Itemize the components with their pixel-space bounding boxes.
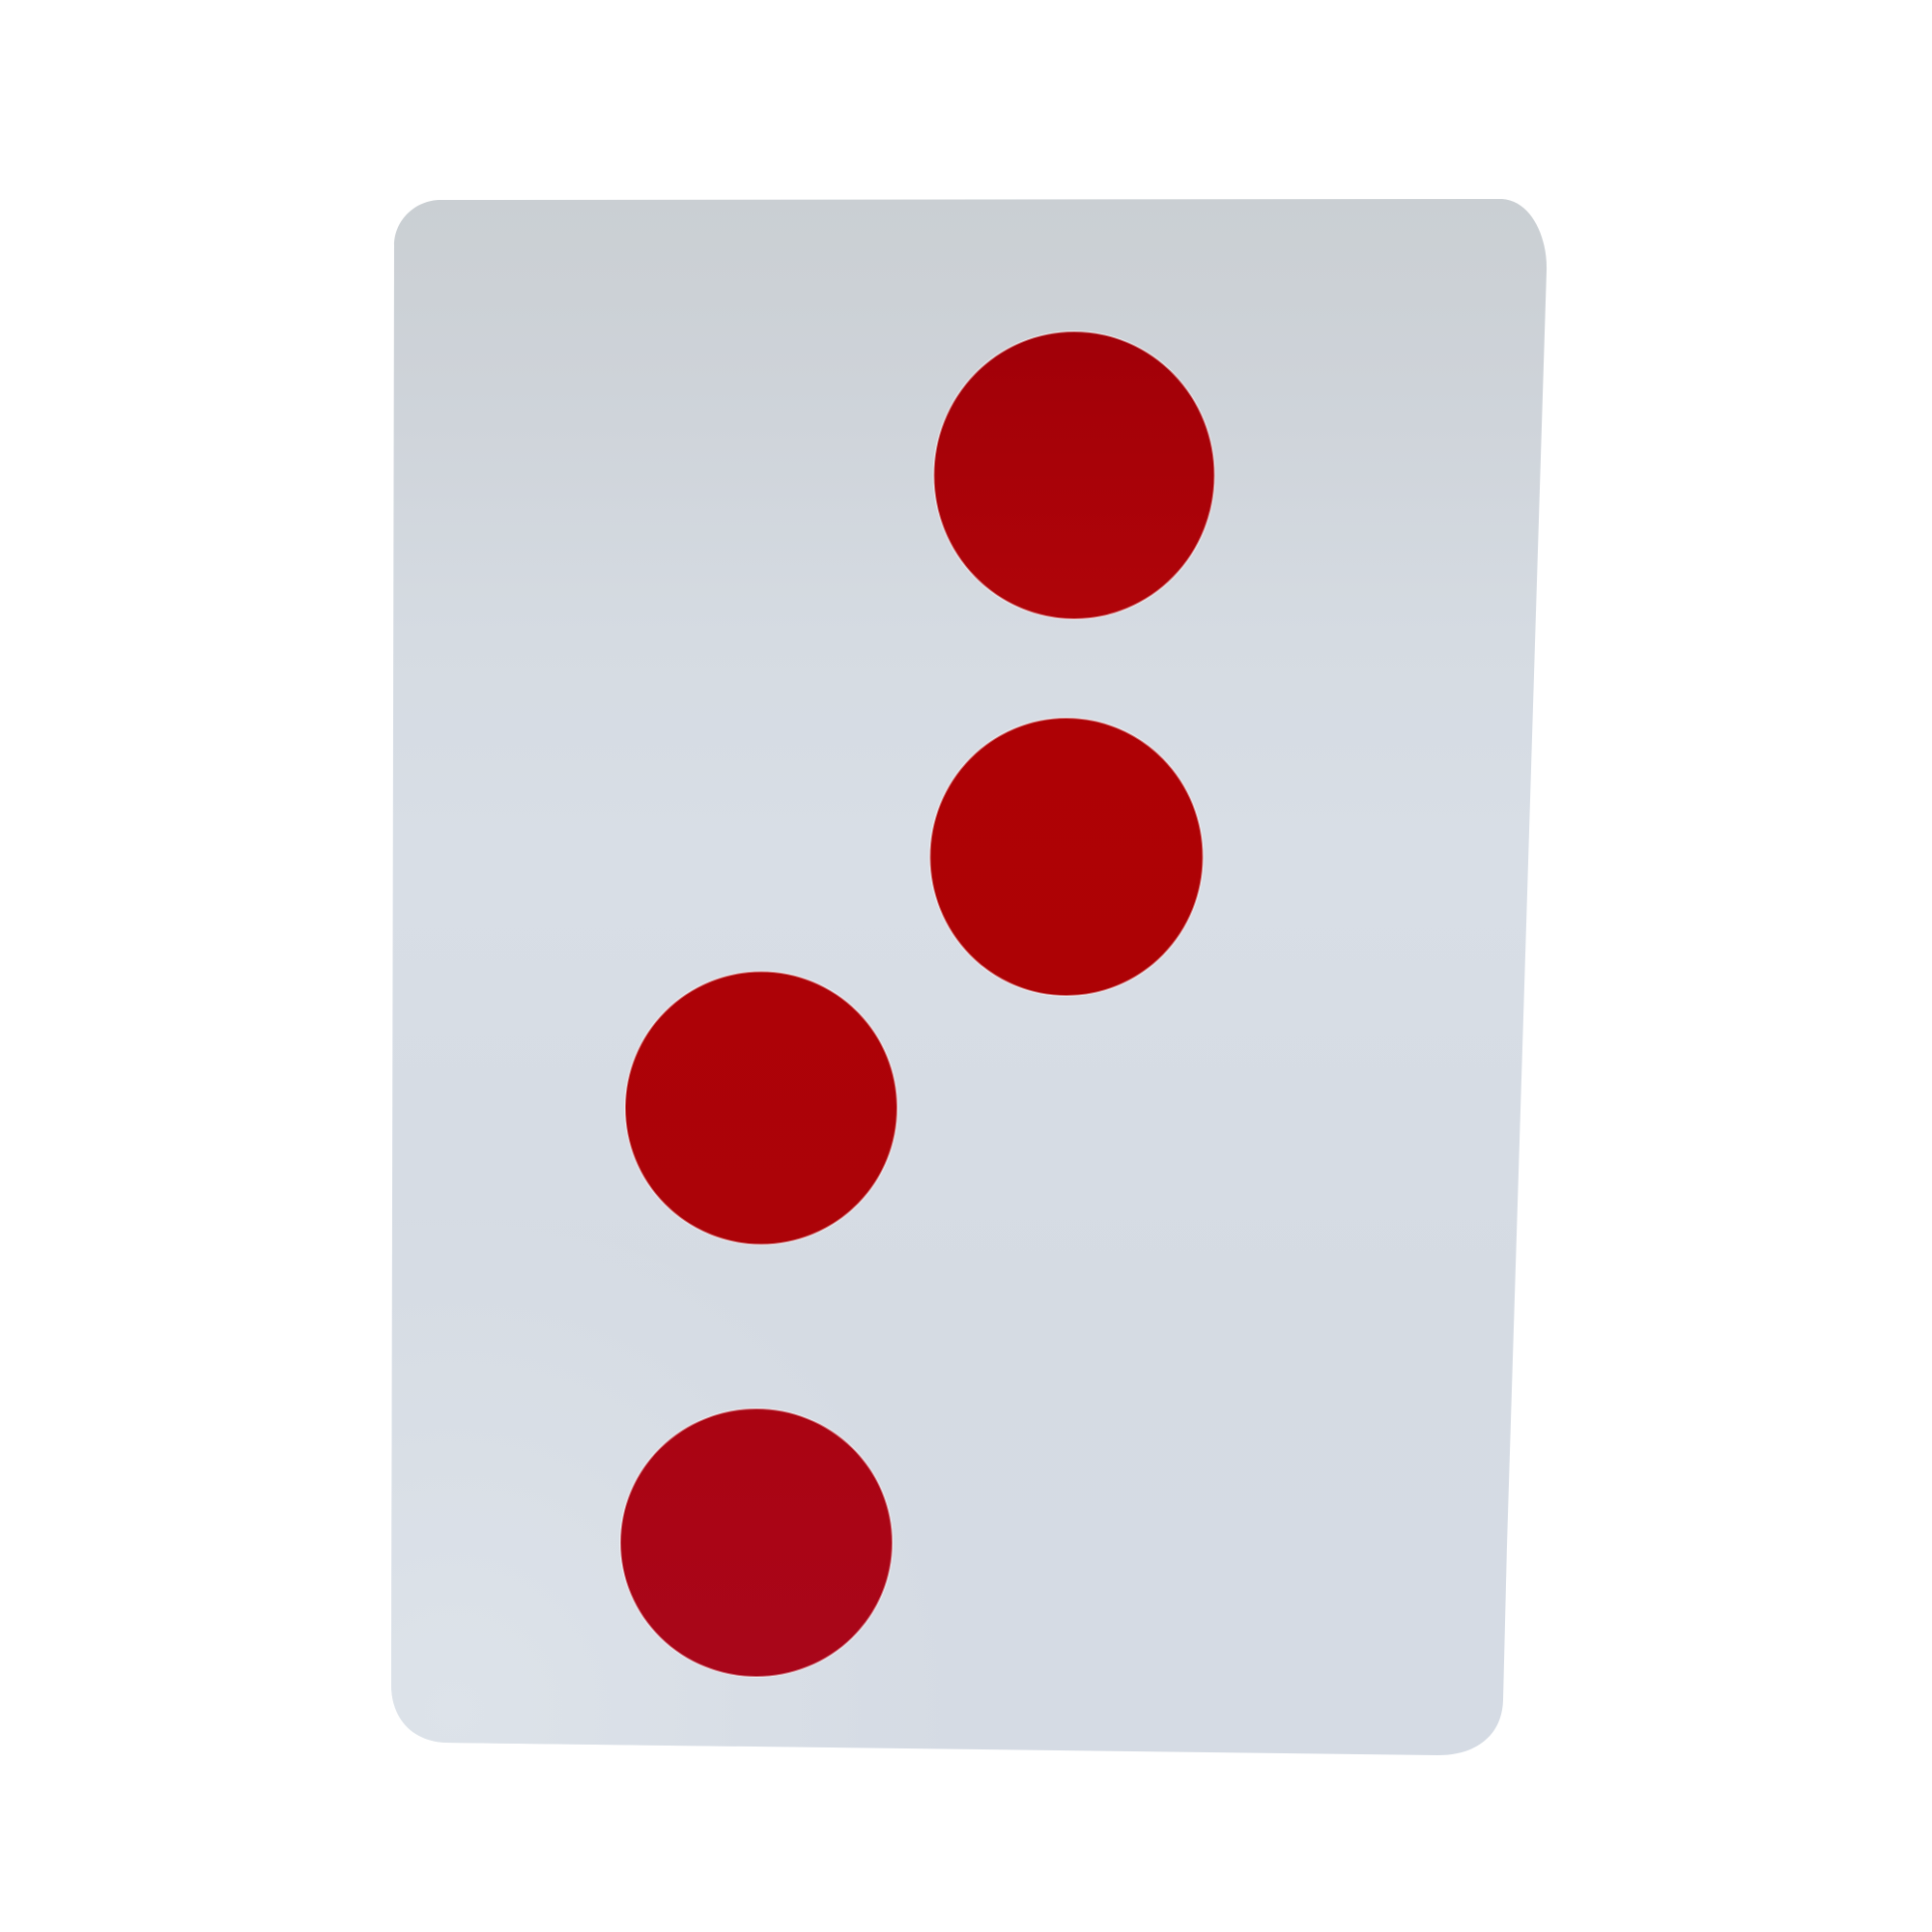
red dot: bottom: [620, 1408, 893, 1677]
panel: card: [391, 199, 1547, 1755]
red dot: lower middle: [625, 972, 897, 1244]
red dot: top: [933, 331, 1215, 619]
red dot: upper middle: [929, 718, 1204, 996]
